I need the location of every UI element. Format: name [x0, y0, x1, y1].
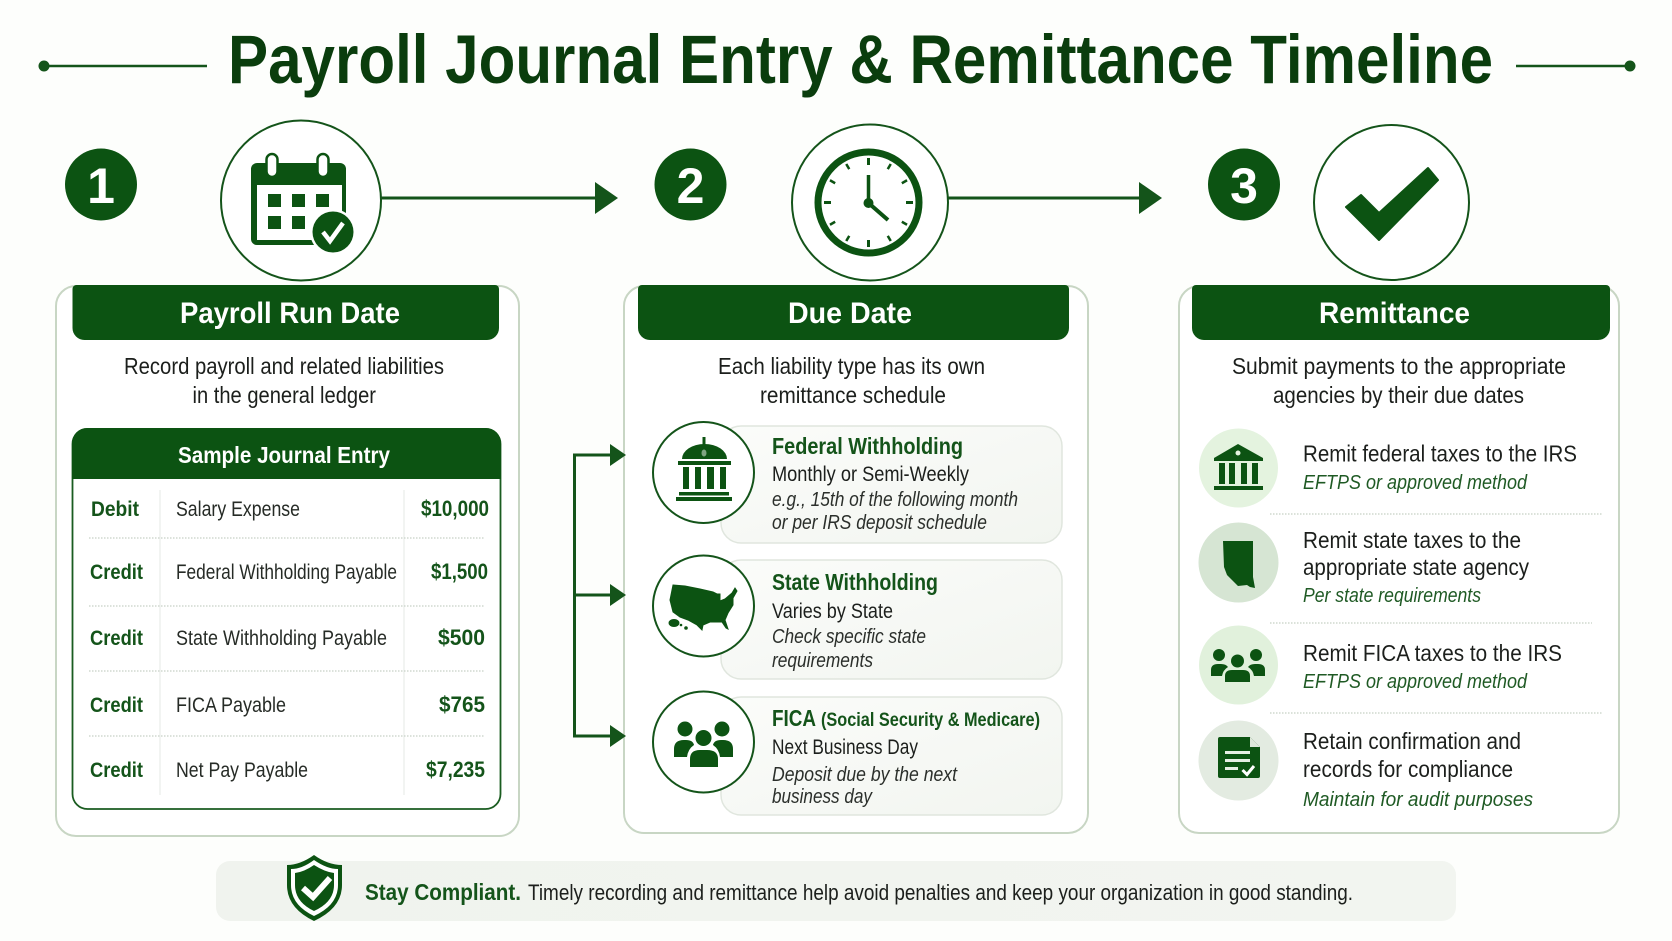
arrow: due date to remittance — [947, 182, 1162, 214]
item: federal taxes: Remit federal taxes to the IRS — [1303, 440, 1577, 466]
row: net pay payable: Credit — [90, 759, 143, 782]
row: federal withholding payable — [90, 559, 488, 584]
step number 1 — [65, 148, 137, 220]
card: fica: business day — [772, 786, 873, 808]
item: state taxes: appropriate state agency — [1303, 554, 1529, 580]
row: net pay payable — [90, 757, 485, 782]
card: fica: FICA — [772, 705, 816, 731]
icon: calendar with check — [221, 120, 381, 280]
row: fica payable: Credit — [90, 694, 143, 717]
panel heading: payroll run date — [72, 285, 499, 340]
panel heading: remittance: Remittance — [1319, 297, 1470, 330]
row: net pay payable: $7,235 — [426, 757, 485, 782]
item: state taxes: Remit state taxes to the — [1303, 527, 1521, 553]
row: salary expense: Salary Expense — [176, 498, 300, 521]
arrow: run date to due date — [381, 182, 618, 214]
item: retain records: records for compliance — [1303, 756, 1513, 782]
row: salary expense — [91, 496, 489, 521]
panel: due date — [624, 285, 1088, 833]
description: due date: remittance schedule — [760, 382, 946, 408]
icon: federal building — [653, 422, 754, 523]
icon: people small — [1199, 626, 1278, 704]
step number 3: 3 — [1230, 158, 1258, 214]
description: payroll run date: in the general ledger — [192, 382, 376, 408]
row: salary expense: $10,000 — [421, 496, 489, 521]
item: federal taxes — [1199, 428, 1577, 508]
title: Payroll Journal Entry & Remittance Timeline — [228, 21, 1493, 98]
item: retain records: Maintain for audit purposes — [1303, 788, 1533, 811]
icon: people — [653, 692, 754, 792]
card: state withholding: Varies by State — [772, 600, 893, 623]
row: fica payable — [90, 692, 485, 717]
step number 2: 2 — [677, 158, 704, 214]
description: due date — [718, 353, 985, 408]
description: remittance: Submit payments to the appropriate — [1232, 353, 1566, 379]
card: federal withholding: e.g., 15th of the following month — [772, 489, 1018, 511]
card: fica: (Social Security & Medicare) — [821, 710, 1040, 731]
row: state withholding payable: State Withholding Payable — [176, 627, 387, 650]
icon: us map — [653, 556, 754, 656]
icon: shield — [287, 855, 342, 921]
callout: stay compliant: Timely recording and remittance help avoid penalties and keep your organization in good standing. — [528, 880, 1353, 905]
icon: clock — [792, 124, 948, 280]
item: federal taxes: EFTPS or approved method — [1303, 471, 1528, 494]
description: remittance: agencies by their due dates — [1273, 382, 1524, 408]
icon: state outline — [1198, 522, 1278, 602]
callout: stay compliant: Stay Compliant. — [365, 879, 521, 905]
connector: schedule branches — [574, 444, 626, 747]
row: fica payable: FICA Payable — [176, 694, 286, 717]
icon: bank — [1199, 428, 1278, 508]
panel heading: payroll run date: Payroll Run Date — [180, 297, 400, 330]
item: fica taxes: EFTPS or approved method — [1303, 670, 1528, 693]
item: fica taxes: Remit FICA taxes to the IRS — [1303, 640, 1562, 666]
table: sample journal entry — [72, 428, 501, 809]
card: fica: Deposit due by the next — [772, 764, 958, 786]
card: state withholding: Check specific state — [772, 626, 926, 648]
description: remittance — [1232, 353, 1566, 408]
panel heading: due date: Due Date — [788, 297, 912, 330]
card: state withholding — [721, 560, 1062, 679]
step number 3 — [1208, 148, 1280, 220]
table: sample journal entry: Sample Journal Entry — [178, 442, 390, 468]
row: state withholding payable: $500 — [438, 625, 485, 650]
row: state withholding payable — [90, 625, 485, 650]
card: state withholding: requirements — [772, 650, 873, 672]
card: fica — [721, 697, 1062, 815]
card: federal withholding: or per IRS deposit schedule — [772, 512, 987, 534]
callout: stay compliant — [216, 855, 1456, 921]
item: retain records — [1198, 720, 1533, 811]
icon: check mark — [1314, 125, 1469, 280]
card: federal withholding: Monthly or Semi-Weekly — [772, 463, 969, 486]
row: net pay payable: Net Pay Payable — [176, 759, 308, 782]
panel: remittance — [1179, 285, 1619, 833]
row: federal withholding payable: Credit — [90, 561, 143, 584]
card: federal withholding — [721, 426, 1062, 543]
panel heading: remittance — [1192, 285, 1610, 340]
card: fica: Next Business Day — [772, 736, 918, 759]
row: federal withholding payable: $1,500 — [431, 559, 488, 584]
row: salary expense: Debit — [91, 498, 139, 521]
row: state withholding payable: Credit — [90, 627, 143, 650]
row: federal withholding payable: Federal Withholding Payable — [176, 561, 397, 584]
item: retain records: Retain confirmation and — [1303, 728, 1521, 754]
item: fica taxes — [1199, 626, 1562, 704]
description: due date: Each liability type has its own — [718, 353, 985, 379]
item: state taxes: Per state requirements — [1303, 584, 1481, 607]
item: state taxes — [1198, 522, 1529, 607]
card: state withholding: State Withholding — [772, 569, 938, 595]
row: fica payable: $765 — [439, 692, 485, 717]
description: payroll run date: Record payroll and related liabilities — [124, 353, 444, 379]
panel: payroll run date — [56, 285, 519, 836]
card: federal withholding: Federal Withholding — [772, 433, 963, 459]
step number 2 — [654, 148, 726, 220]
icon: document — [1198, 720, 1278, 800]
step number 1: 1 — [87, 158, 115, 214]
description: payroll run date — [124, 353, 444, 408]
panel heading: due date — [638, 285, 1069, 340]
